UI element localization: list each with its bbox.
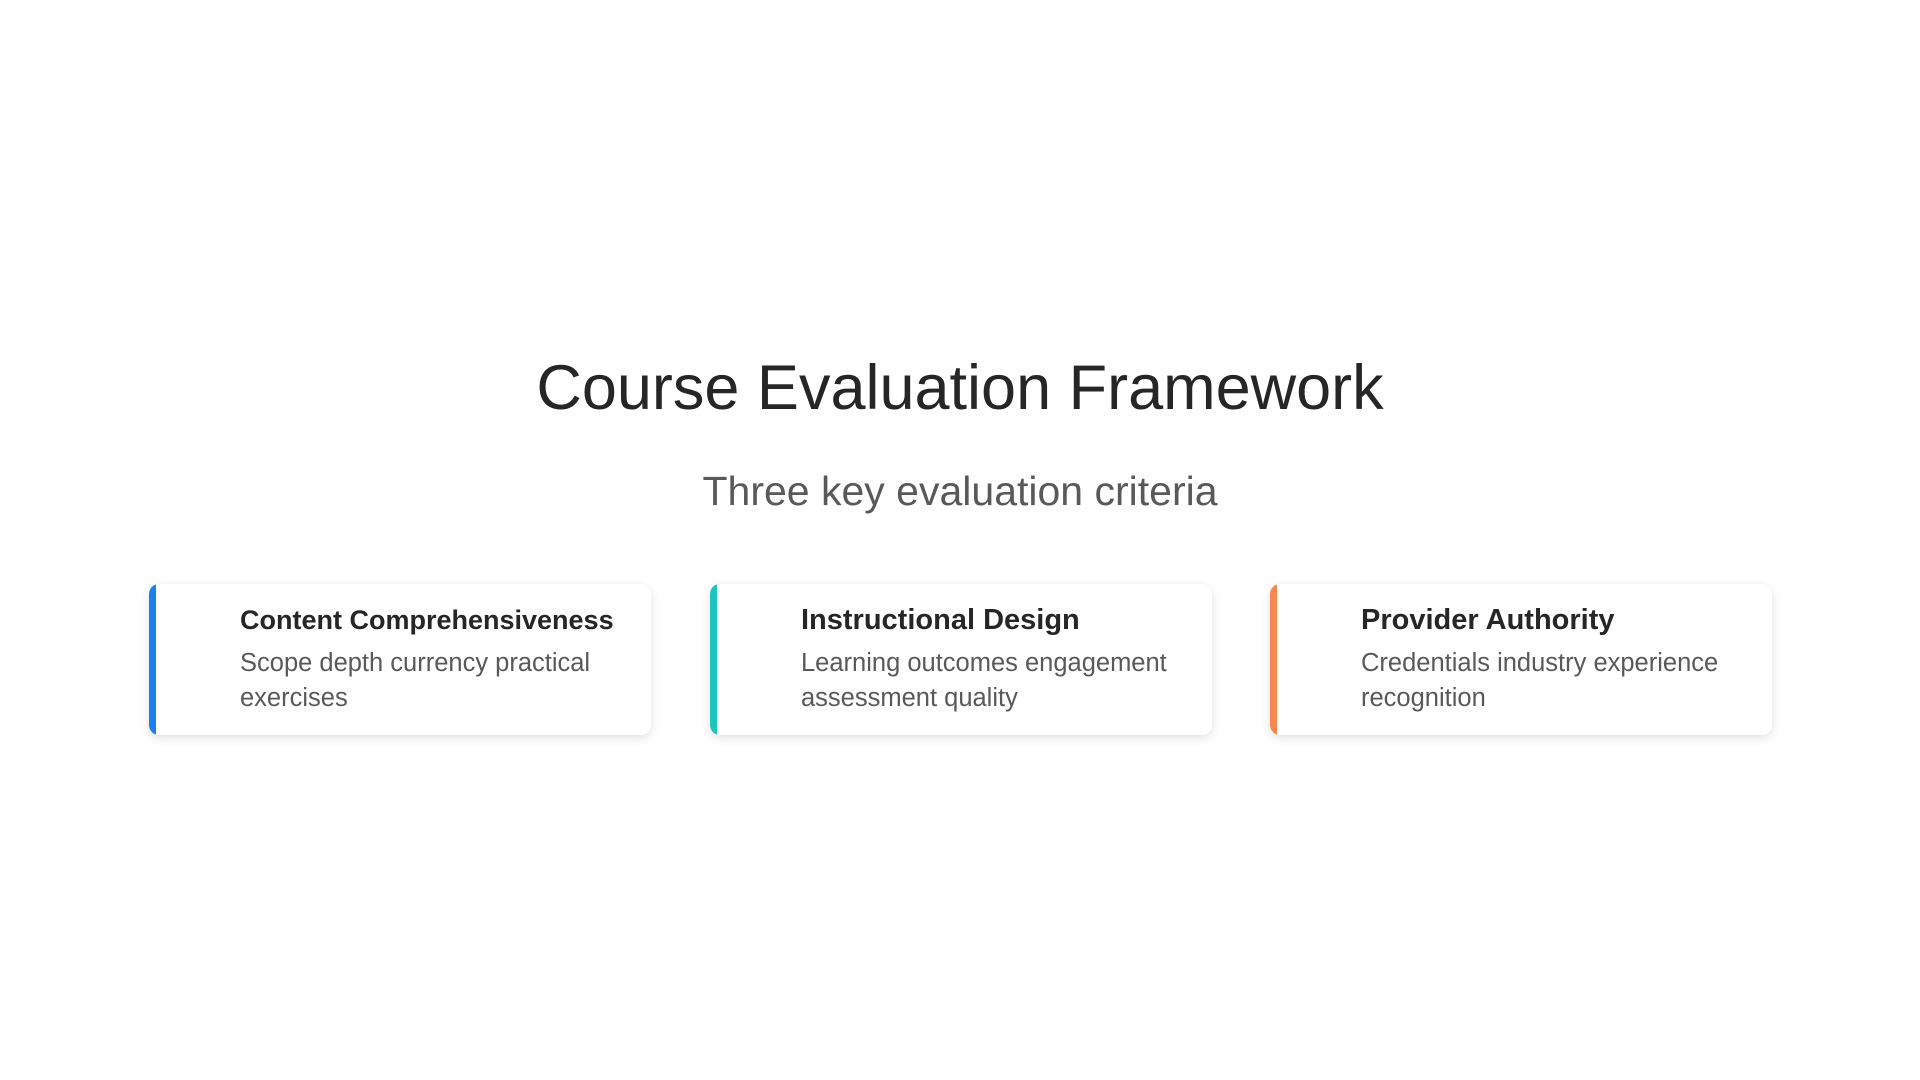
accent bar blue [149, 584, 156, 735]
card text: Credentials industry experience recognition [1361, 649, 1718, 712]
card heading: Instructional Design [801, 604, 1080, 636]
card heading: Content Comprehensiveness [240, 605, 614, 635]
subtitle: Three key evaluation criteria [702, 468, 1218, 514]
card text: Scope depth currency practical exercises [240, 649, 590, 712]
card heading: Provider Authority [1361, 604, 1615, 636]
title: Course Evaluation Framework [536, 353, 1384, 423]
accent bar teal [710, 584, 717, 735]
card: content comprehensiveness [149, 584, 651, 735]
card text: Learning outcomes engagement assessment quality [801, 649, 1167, 712]
card: provider authority [1270, 584, 1772, 735]
accent bar orange [1270, 584, 1277, 735]
card: instructional design [710, 584, 1212, 735]
